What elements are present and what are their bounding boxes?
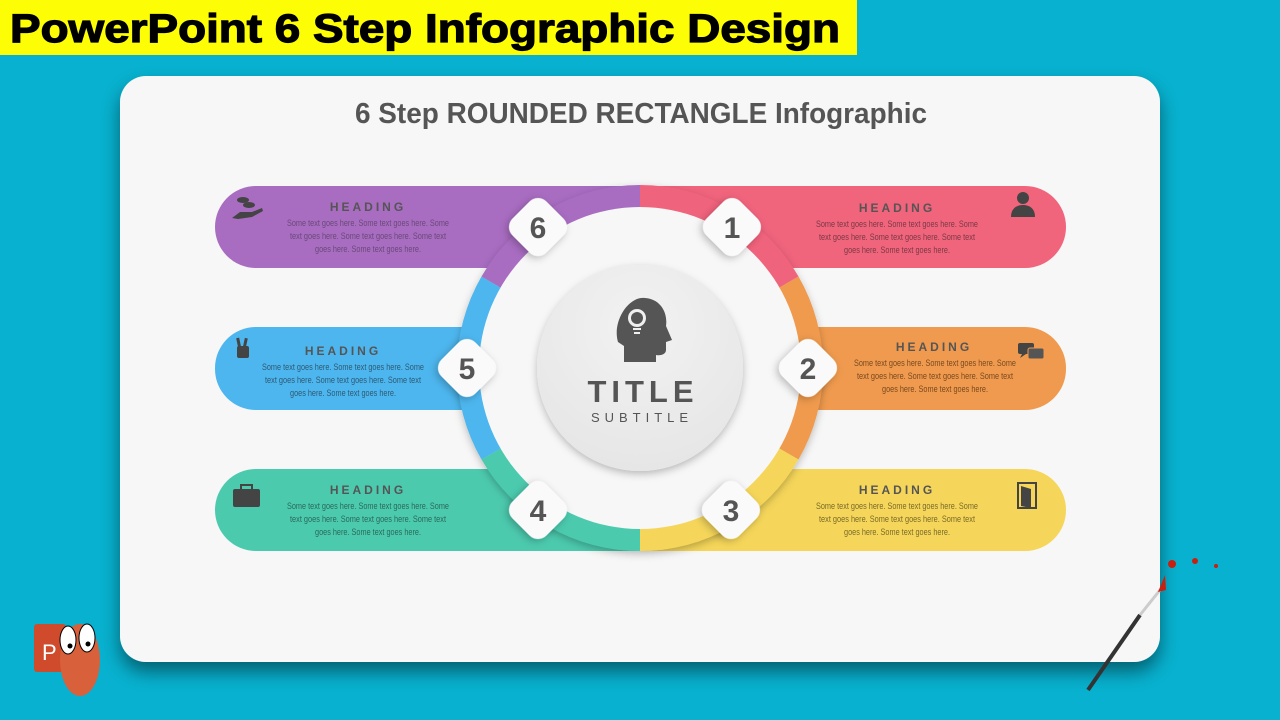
icons (232, 192, 1044, 508)
text: step 5: goes here. Some text goes here. (290, 388, 396, 398)
icon: briefcase (233, 485, 260, 507)
text: step 2: text goes here. Some text goes here. Some text (857, 371, 1013, 381)
text: step 4: text goes here. Some text goes here. Some text (290, 514, 446, 524)
text: step 1: text goes here. Some text goes here. Some text (819, 232, 975, 242)
bar: step 1 pink (605, 186, 1066, 268)
text: step 3: Some text goes here. Some text goes here. Some (816, 501, 978, 511)
badge 1: 1 (724, 212, 740, 245)
text: step 6 (287, 200, 449, 254)
text: step 6: goes here. Some text goes here. (315, 244, 421, 254)
paintbrush (1088, 558, 1218, 690)
ring (457, 185, 823, 551)
icon: hand with coins (232, 197, 263, 219)
badge 5 (433, 334, 501, 402)
bar: step 2 orange (765, 327, 1066, 410)
subtitle heading: 6 Step ROUNDED RECTANGLE Infographic (355, 98, 927, 130)
text: step 6: HEADING (330, 200, 406, 214)
text: step 2: HEADING (896, 340, 972, 354)
mascot (34, 624, 100, 696)
text: step 5 (262, 344, 424, 398)
center title: TITLE (587, 374, 699, 409)
text: step 3: HEADING (859, 483, 935, 497)
badge 6 (504, 193, 572, 261)
badge 1 (698, 193, 766, 261)
text: step 6: Some text goes here. Some text goes here. Some (287, 218, 449, 228)
bar: step 6 purple (215, 186, 675, 268)
text: step 6: text goes here. Some text goes here. Some text (290, 231, 446, 241)
text: step 4 (287, 483, 449, 537)
bar: step 3 yellow (605, 469, 1066, 551)
bar: step 4 teal (215, 469, 675, 551)
title banner (0, 0, 857, 55)
mascot: P (42, 640, 57, 665)
number badges (433, 193, 842, 544)
center subtitle: SUBTITLE (591, 410, 693, 425)
badge 6: 6 (530, 212, 546, 245)
icon: victory hand (236, 338, 249, 358)
text: step 2 (854, 340, 1016, 394)
text: step 1: goes here. Some text goes here. (844, 245, 950, 255)
text: step 4: HEADING (330, 483, 406, 497)
text: step 3 (816, 483, 978, 537)
icon: head with lightbulb (617, 298, 672, 362)
badge 2: 2 (800, 353, 816, 386)
badge 4 (504, 476, 572, 544)
bar: step 5 blue (215, 327, 515, 410)
text: step 2: goes here. Some text goes here. (882, 384, 988, 394)
text: step 1: HEADING (859, 201, 935, 215)
text: step 5: Some text goes here. Some text goes here. Some (262, 362, 424, 372)
badge 3: 3 (723, 495, 739, 528)
badge 3 (697, 476, 765, 544)
text: step 4: goes here. Some text goes here. (315, 527, 421, 537)
text: step 1: Some text goes here. Some text goes here. Some (816, 219, 978, 229)
text: step 2: Some text goes here. Some text goes here. Some (854, 358, 1016, 368)
center disk (537, 265, 743, 471)
text: step 3: goes here. Some text goes here. (844, 527, 950, 537)
text: step 1 (816, 201, 978, 255)
icon: businessman (1011, 192, 1035, 217)
icon: door (1018, 483, 1036, 508)
badge 5: 5 (459, 353, 475, 386)
title banner: PowerPoint 6 Step Infographic Design (10, 7, 840, 51)
card panel (120, 76, 1160, 662)
text: step 5: HEADING (305, 344, 381, 358)
text blocks (262, 200, 1016, 537)
text: step 4: Some text goes here. Some text goes here. Some (287, 501, 449, 511)
text: step 5: text goes here. Some text goes here. Some text (265, 375, 421, 385)
badge 2 (774, 334, 842, 402)
text: step 3: text goes here. Some text goes here. Some text (819, 514, 975, 524)
icon: chat bubbles (1018, 343, 1044, 359)
badge 4: 4 (530, 495, 547, 528)
